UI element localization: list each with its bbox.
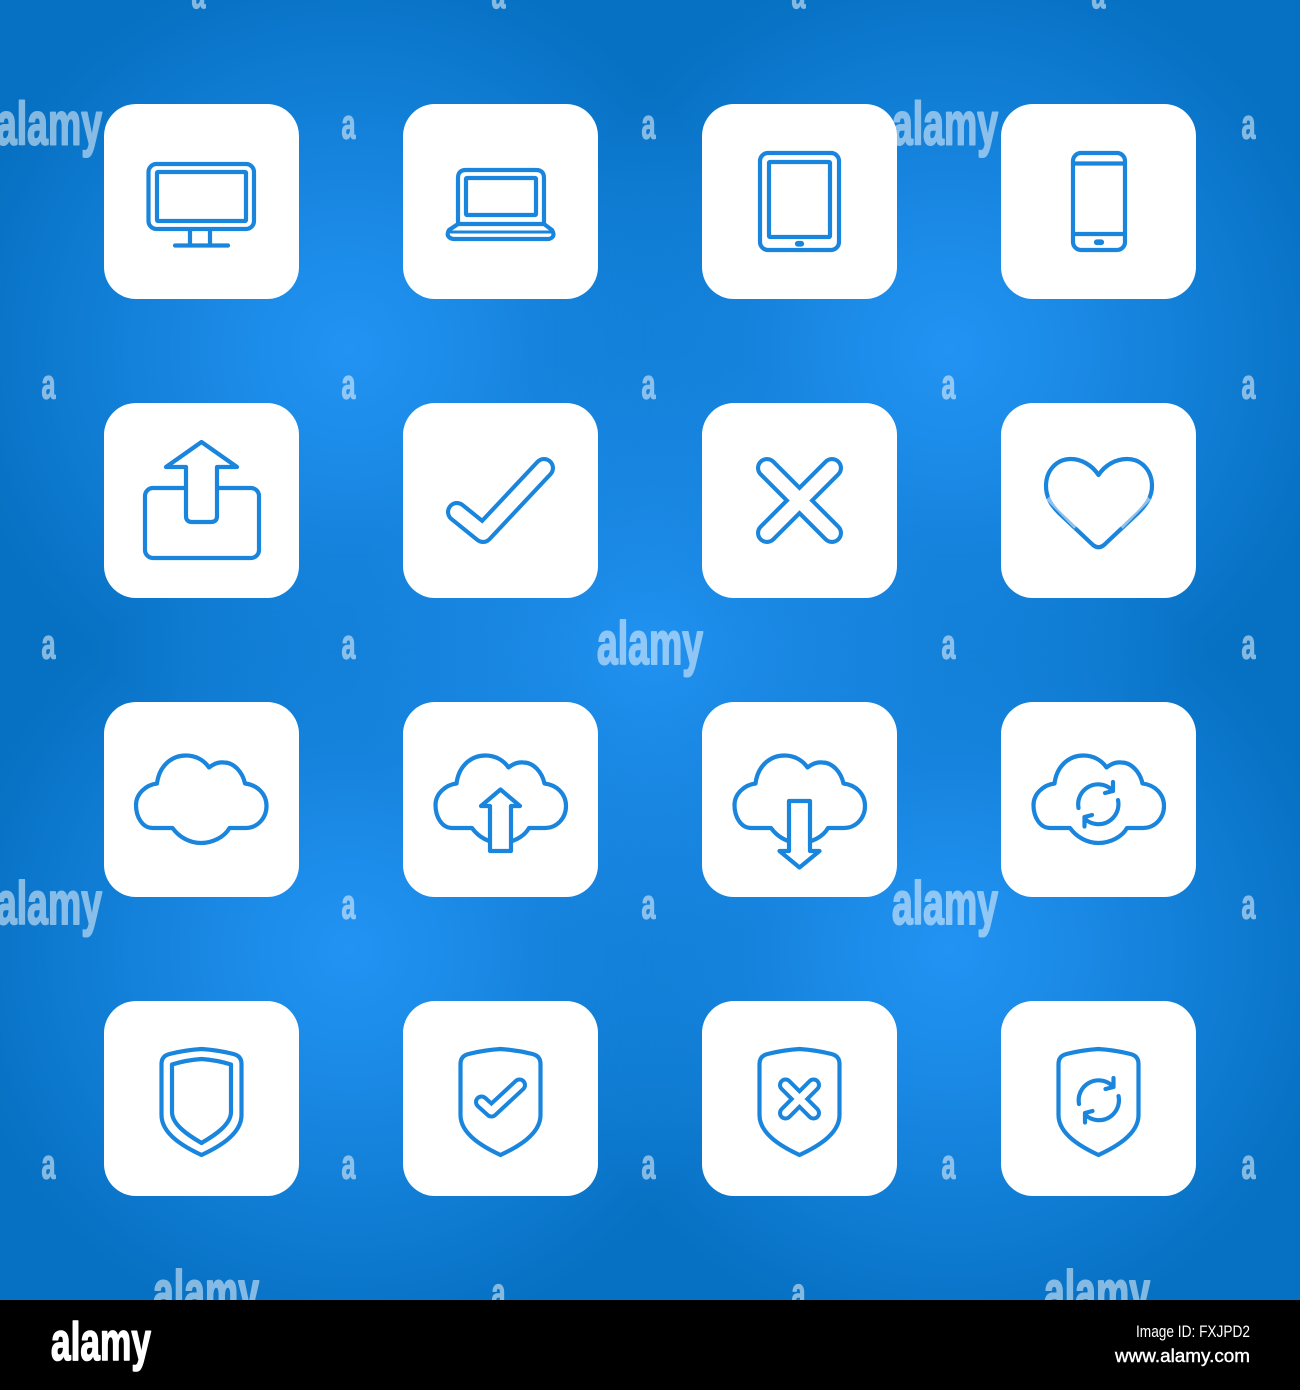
card: cloud sync [1001, 702, 1196, 897]
watermark pattern: a [942, 1140, 956, 1188]
watermark pattern: a [42, 360, 56, 408]
card: smartphone [1001, 104, 1196, 299]
card: shield [104, 1001, 299, 1196]
card: share upload [104, 403, 299, 598]
watermark pattern: alamy [0, 90, 102, 158]
watermark pattern: alamy [0, 870, 102, 937]
watermark pattern: a [342, 620, 356, 668]
watermark pattern: a [942, 620, 956, 668]
icon: shield with check [460, 1049, 540, 1155]
icon: check [457, 468, 544, 533]
icon: cloud with up arrow [436, 756, 566, 851]
card: cloud upload [403, 702, 598, 897]
watermark pattern: a [1242, 100, 1256, 148]
watermark pattern: a [642, 360, 656, 408]
icon: smartphone [1073, 153, 1125, 250]
icon: heart [1046, 459, 1152, 547]
card: tablet [702, 104, 897, 299]
card: cross [702, 403, 897, 598]
card: check mark [403, 403, 598, 598]
watermark pattern: a [942, 360, 956, 408]
watermark pattern: alamy [892, 870, 998, 937]
watermark pattern: a [792, 1269, 806, 1316]
watermark pattern: a [42, 1140, 56, 1188]
card: shield sync [1001, 1001, 1196, 1196]
card: shield cross [702, 1001, 897, 1196]
icon: shield with sync arrows [1058, 1049, 1138, 1155]
card: heart [1001, 403, 1196, 598]
watermark pattern: alamy [892, 90, 998, 158]
icon: shield with cross [760, 1049, 840, 1155]
watermark pattern: a [642, 1140, 656, 1188]
watermark pattern: alamy [153, 1259, 259, 1326]
watermark pattern: a [342, 1140, 356, 1188]
card: cloud download [702, 702, 897, 897]
footer bar [0, 1300, 1300, 1390]
card: shield check [403, 1001, 598, 1196]
watermark pattern: a [1242, 620, 1256, 668]
watermark pattern: alamy [1044, 1259, 1150, 1326]
card: cloud [104, 702, 299, 897]
icon: laptop [448, 170, 553, 239]
watermark pattern: a [1242, 360, 1256, 408]
footer logo: alamy [51, 1312, 151, 1372]
icon: cloud with sync arrows [1034, 756, 1164, 843]
icon: tablet [760, 153, 839, 250]
icon: cloud with down arrow [734, 756, 865, 868]
watermark pattern: a [342, 360, 356, 408]
icon: monitor [148, 164, 254, 246]
website: www.alamy.com [1114, 1346, 1250, 1366]
card: laptop [403, 104, 598, 299]
icon: cross [767, 468, 832, 533]
watermark pattern: a [642, 880, 656, 928]
icon: shield [162, 1049, 242, 1155]
image id: Image ID: FXJPD2 [1136, 1322, 1250, 1341]
watermark pattern: a [342, 880, 356, 928]
watermark pattern: a [642, 100, 656, 148]
watermark pattern: alamy [597, 610, 703, 677]
watermark pattern: a [342, 100, 356, 148]
watermark pattern: a [42, 620, 56, 668]
icon: cloud [136, 756, 266, 843]
watermark pattern: a [1242, 880, 1256, 928]
watermark pattern: a [1242, 1140, 1256, 1188]
watermark pattern: a [492, 1269, 506, 1316]
icon: upload from tray [145, 442, 259, 558]
card: desktop monitor [104, 104, 299, 299]
